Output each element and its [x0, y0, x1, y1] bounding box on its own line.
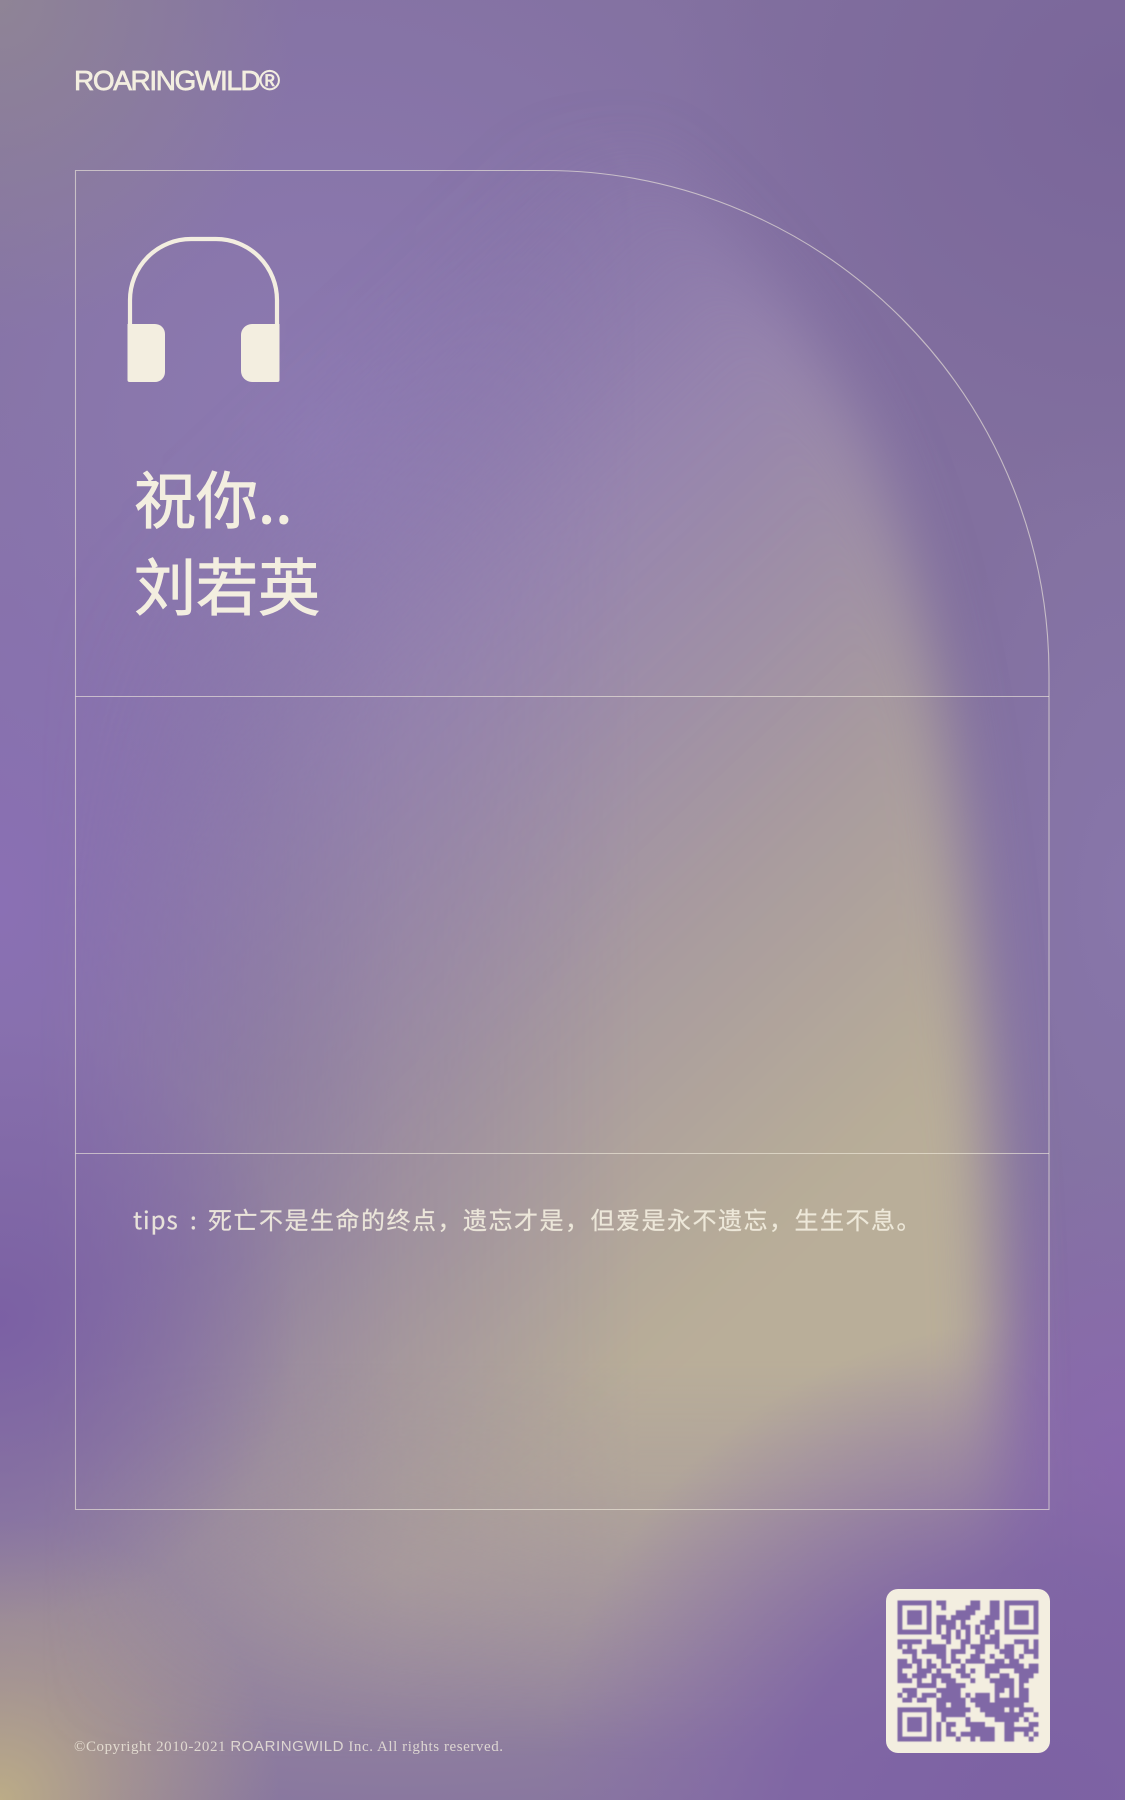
- background: lower right purple: [500, 1300, 1125, 1800]
- frame: arched outline with dividers: [76, 170, 1049, 1510]
- text: tips: tips: [133, 1201, 179, 1236]
- heading: greeting and name: 刘若英: [134, 538, 320, 628]
- text: tips: 死亡不是生命的终点，遗忘才是，但爱是永不遗忘，生生不息。: [208, 1201, 922, 1236]
- QR code: [886, 1589, 1050, 1753]
- background: left dark purple: [0, 1020, 300, 1620]
- background: glow blob: [182, 250, 1030, 1692]
- logo: ROARINGWILD: ROARINGWILD®: [74, 65, 280, 96]
- text: tips: :: [190, 1201, 197, 1236]
- heading: greeting and name: 祝你..: [134, 451, 292, 541]
- text: copyright: ©Copyright 2010-2021 ROARINGWILD Inc. All rights reserved.: [74, 1738, 503, 1755]
- heading: greeting and name: [134, 451, 320, 628]
- icon: headphones: [128, 239, 280, 382]
